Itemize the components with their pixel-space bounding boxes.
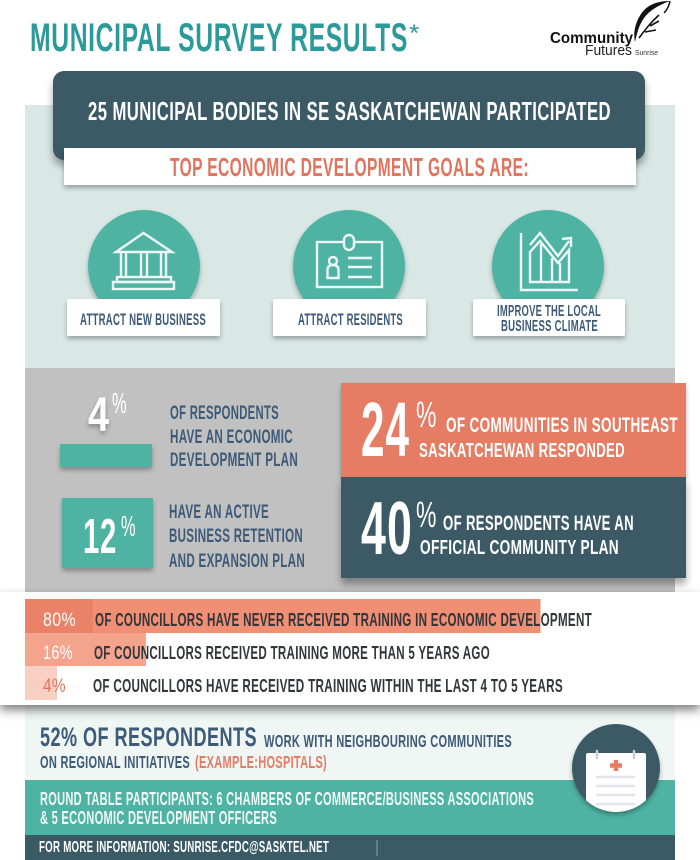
bar row: 80 percent: 80% [43, 610, 76, 631]
text: 52 percent of respondents [40, 722, 512, 772]
panel: 40 percent official community plan: 40 [361, 486, 413, 570]
bar row: 4 percent: 4% [43, 676, 66, 697]
heading: top economic development goals [64, 148, 636, 185]
icon: feather [634, 1, 670, 42]
logo: Community Futures Sunrise: Futures [585, 42, 632, 59]
title: MUNICIPAL SURVEY RESULTS [30, 16, 408, 60]
logo: Community Futures Sunrise [550, 1, 670, 59]
panel: grey statistics background [25, 368, 675, 592]
icon: bank building [113, 233, 174, 289]
panel: 40 percent official community plan [341, 477, 686, 578]
goal: attract new business [67, 210, 220, 336]
stat: 12 percent: % [121, 511, 136, 543]
text: business retention plan: AND EXPANSION PLAN [169, 550, 305, 572]
text: 52 percent of respondents: ON REGIONAL INITIATIVES [40, 752, 190, 772]
label: attract new business: ATTRACT NEW BUSINESS [80, 310, 206, 329]
footer: contact information [25, 835, 675, 860]
panel: councillor training [0, 592, 700, 705]
text: business retention plan [169, 501, 305, 572]
panel: 24 percent responded [341, 383, 686, 477]
stat: 12 percent: 12 [83, 510, 117, 564]
panel: 24 percent responded: 24 [361, 387, 410, 473]
label: attract residents [273, 299, 426, 336]
panel: round table participants [25, 780, 675, 835]
label: improve the local business climate: IMPROVE THE LOCAL [497, 303, 601, 320]
bar row: 16 percent [25, 633, 490, 666]
banner: 25 municipal bodies [53, 71, 645, 160]
panel: light goals background [25, 105, 675, 368]
label: improve the local business climate [473, 299, 625, 336]
goal: attract residents [273, 210, 426, 336]
text: economic development plan: HAVE AN ECONOMIC [170, 426, 293, 448]
text: 52 percent of respondents: WORK WITH NEIGHBOURING COMMUNITIES [264, 731, 512, 751]
panel: round table participants: & 5 ECONOMIC DEVELOPMENT OFFICERS [40, 808, 277, 828]
text: 52 percent of respondents: 52% OF RESPONDENTS [40, 722, 257, 752]
panel: 40 percent official community plan: % [416, 494, 437, 535]
label: attract residents: ATTRACT RESIDENTS [298, 310, 403, 329]
label: attract new business [67, 299, 220, 336]
text: business retention plan: HAVE AN ACTIVE [169, 501, 269, 523]
stat: 4 percent: 4 [88, 389, 110, 442]
panel: 24 percent responded: % [416, 394, 437, 435]
logo: Community Futures Sunrise: Sunrise [635, 50, 658, 57]
bar row: 16 percent: 16% [43, 643, 73, 664]
text: economic development plan: OF RESPONDENTS [170, 402, 279, 424]
stat: 4 percent: % [112, 388, 127, 420]
icon: id badge [317, 235, 382, 287]
text: business retention plan: BUSINESS RETENTION [169, 525, 303, 547]
icon: medical notepad [572, 724, 660, 813]
panel: lower light background [25, 700, 675, 780]
goal: improve business climate [473, 210, 625, 336]
logo: Community Futures Sunrise: Community [550, 30, 633, 47]
bar row: 4 percent [25, 666, 563, 700]
label: improve the local business climate: BUSINESS CLIMATE [501, 318, 598, 335]
footer: contact information: FOR MORE INFORMATION: SUNRISE.CFDC@SASKTEL.NET [39, 839, 329, 856]
title: * [409, 20, 420, 47]
stat: 12 percent [62, 498, 305, 572]
bar row: 80 percent [25, 599, 592, 633]
stat: 4 percent [60, 388, 298, 471]
icon: rising chart [521, 233, 578, 290]
text: economic development plan: DEVELOPMENT PLAN [170, 449, 298, 471]
text: economic development plan [170, 402, 298, 471]
title [30, 16, 420, 60]
text: 52 percent of respondents: (EXAMPLE:HOSPITALS) [195, 752, 327, 772]
